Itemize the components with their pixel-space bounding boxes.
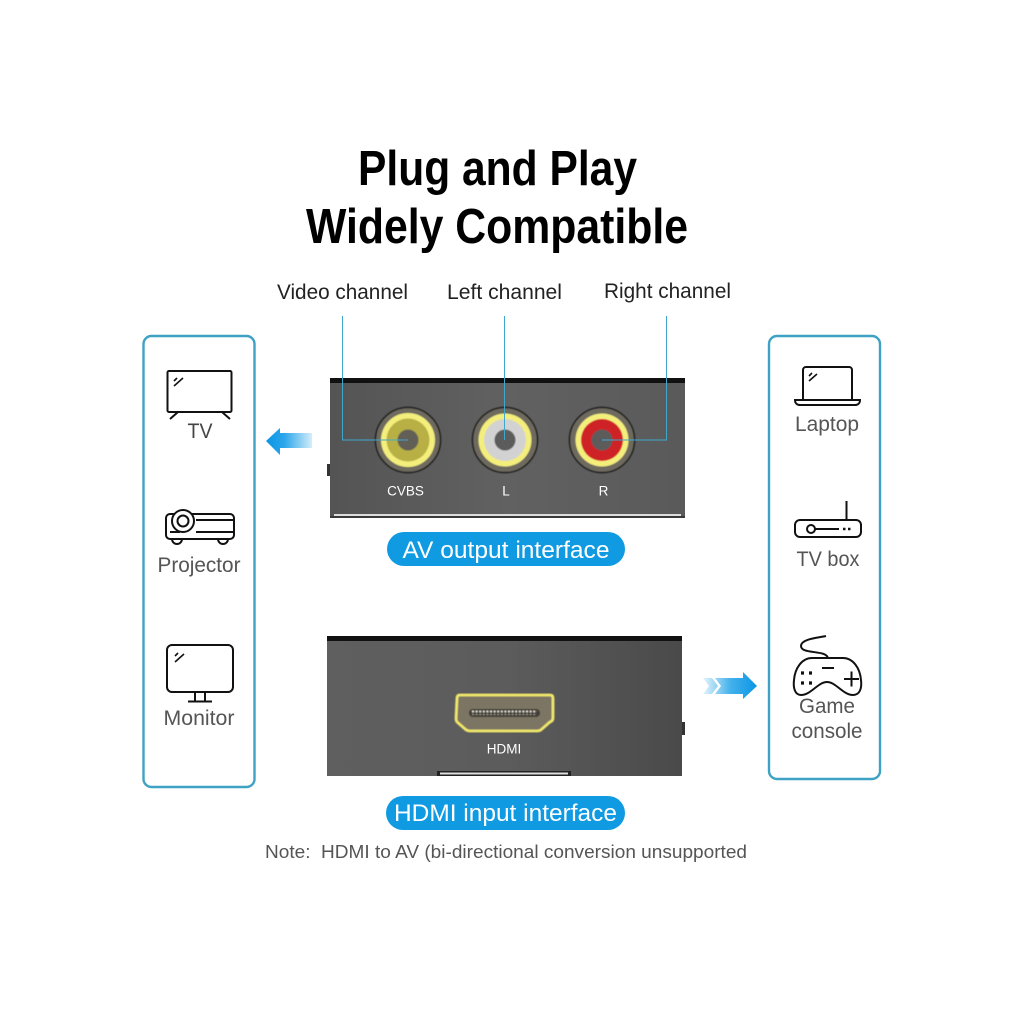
channel labels: Left channel [447,281,562,304]
channel leader lines [342,316,666,440]
device: HDMI input side [327,636,685,776]
icon: TV box [795,501,861,537]
label: HDMI: HDMI [487,742,521,756]
arrow: to output devices [266,428,312,455]
jack: CVBS [376,408,440,472]
icon: monitor [167,645,233,702]
label: Game console: console [792,720,862,743]
jack labels: R [599,484,609,498]
arrow: from input devices [703,672,757,699]
title: Widely Compatible [306,200,688,254]
panel: output devices [144,336,254,787]
label: Game console [792,695,862,743]
jack: L [472,408,538,472]
channel labels: Right channel [604,280,731,303]
label: Game console: Game [799,695,855,718]
device: AV output side [327,378,685,518]
jack labels [387,484,609,498]
HDMI port [456,695,553,731]
label: Projector: Projector [158,554,241,577]
jack labels: L [502,484,510,498]
icon: projector [166,510,234,544]
label: TV: TV [188,420,212,443]
title [306,142,688,254]
icon: TV [168,371,232,419]
icon: game console [794,636,861,695]
pill: HDMI input interface: HDMI input interface [394,800,617,827]
icon: laptop [795,367,860,405]
jack labels: CVBS [387,484,424,498]
label: Laptop: Laptop [795,413,859,436]
pill: AV output interface [387,532,625,566]
label: Monitor: Monitor [164,707,234,730]
note: Note: HDMI to AV (bi-directional conversion unsupported [265,842,747,862]
channel labels: Video channel [277,281,408,304]
channel labels [277,280,731,304]
panel: input devices [769,336,880,779]
jack: R [570,408,634,472]
pill: AV output interface: AV output interface [402,537,610,564]
title: Plug and Play [358,142,637,196]
label: TV box: TV box [796,548,860,571]
